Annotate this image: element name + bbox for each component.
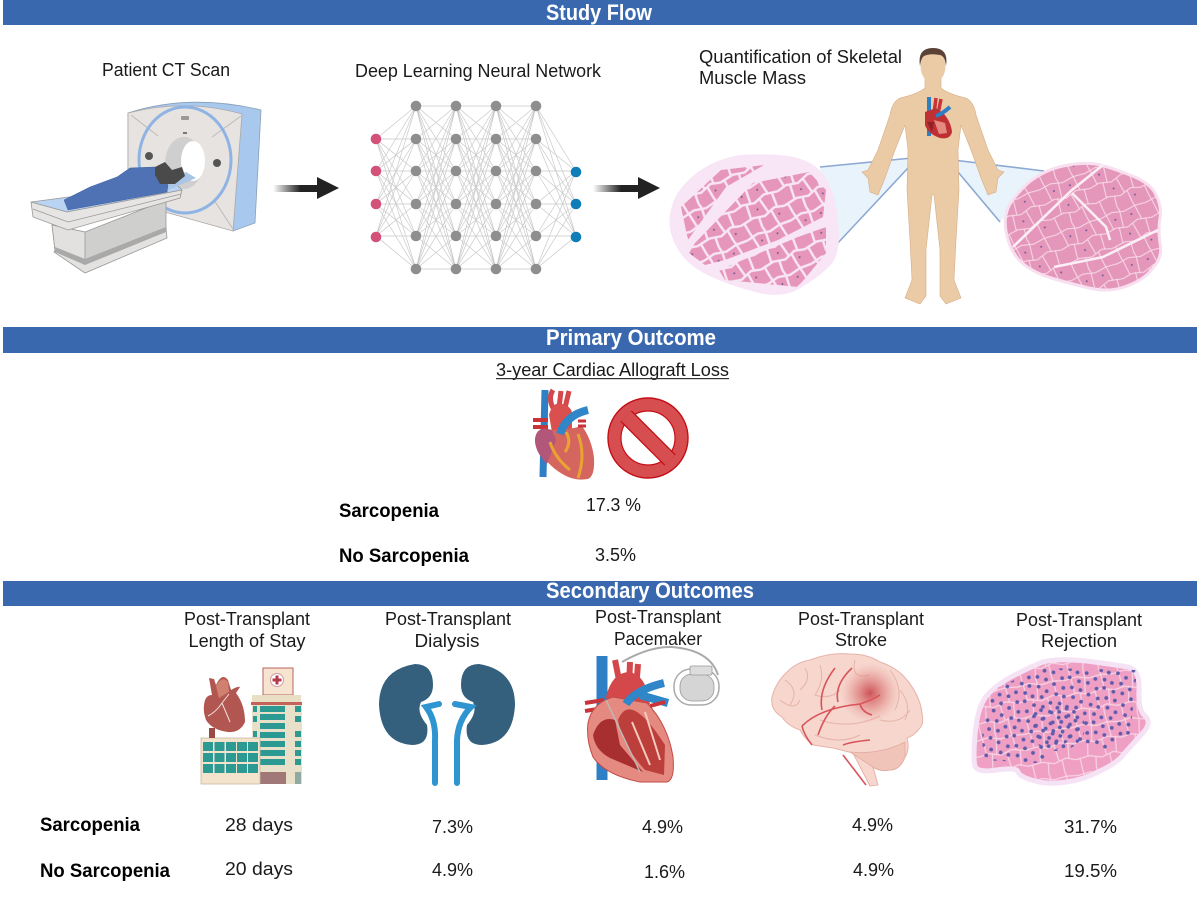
- column heading: Rejection: Post-Transplant: [1016, 609, 1142, 630]
- icon: prohibition sign: [608, 398, 688, 478]
- arrow: CT to network: [273, 177, 339, 199]
- column heading: Dialysis: Post-Transplant: [385, 608, 511, 629]
- illustration: human body with heart: [862, 48, 1004, 304]
- icon: heart and hospital: [201, 668, 302, 784]
- column heading: Pacemaker: Pacemaker: [614, 628, 702, 649]
- icon: CT scanner with patient: [31, 102, 261, 273]
- icon: kidneys: [379, 664, 515, 783]
- primary outcome row: No Sarcopenia: [339, 544, 636, 567]
- secondary outcomes row: No Sarcopenia: 4.9%: [432, 859, 473, 880]
- section header: Study Flow: Study Flow: [546, 0, 653, 25]
- column heading: Length of Stay: Post-Transplant: [184, 608, 310, 629]
- step label: Deep Learning Neural Network: Deep Learning Neural Network: [355, 60, 602, 81]
- section header: Study Flow: [3, 0, 1197, 25]
- secondary outcomes row: No Sarcopenia: No Sarcopenia: [40, 860, 170, 882]
- column heading: Stroke: Post-Transplant: [798, 608, 924, 629]
- step label: Quantification of Skeletal Muscle Mass: Quantification of Skeletal: [699, 46, 902, 67]
- icon: brain with stroke: [772, 654, 923, 786]
- secondary outcomes row: Sarcopenia: Sarcopenia: [40, 814, 140, 836]
- column heading: Rejection: [1016, 609, 1142, 651]
- subheading: 3-year Cardiac Allograft Loss: 3-year Cardiac Allograft Loss: [496, 359, 729, 380]
- column heading: Length of Stay: Length of Stay: [188, 630, 306, 651]
- column heading: Dialysis: Dialysis: [414, 630, 480, 651]
- secondary outcomes row: No Sarcopenia: 20 days: [225, 858, 293, 879]
- column heading: Pacemaker: Post-Transplant: [595, 606, 721, 627]
- column heading: Length of Stay: [184, 608, 310, 651]
- section header: Primary Outcome: [3, 325, 1197, 353]
- column heading: Stroke: [798, 608, 924, 650]
- primary outcome row: Sarcopenia: [339, 494, 641, 522]
- column heading: Rejection: Rejection: [1041, 630, 1117, 651]
- illustration: healthy muscle cross-section: [1005, 163, 1161, 290]
- body heart: [925, 97, 952, 138]
- secondary outcomes row: No Sarcopenia: 19.5%: [1064, 860, 1117, 881]
- secondary outcomes row: Sarcopenia: 4.9%: [642, 816, 683, 837]
- primary outcome row: Sarcopenia: 17.3 %: [586, 494, 641, 515]
- column heading: Stroke: Stroke: [835, 629, 887, 650]
- section header: Primary Outcome: Primary Outcome: [546, 325, 716, 350]
- section header: Secondary Outcomes: [3, 578, 1197, 606]
- secondary outcomes row: Sarcopenia: 4.9%: [852, 814, 893, 835]
- diagram: neural network: [371, 101, 581, 274]
- primary outcome row: No Sarcopenia: No Sarcopenia: [339, 545, 469, 567]
- arrow: network to quantification: [593, 177, 660, 199]
- secondary outcomes row: Sarcopenia: 28 days: [225, 814, 293, 835]
- callout wedges linking body to muscle: [820, 158, 1044, 245]
- icon: heart with pacemaker: [585, 647, 719, 782]
- illustration: muscle cross-section with sarcopenia: [671, 156, 837, 293]
- column heading: Dialysis: [385, 608, 511, 651]
- column heading: Pacemaker: [595, 606, 721, 649]
- primary outcome row: Sarcopenia: Sarcopenia: [339, 500, 439, 522]
- secondary outcomes row: Sarcopenia: 31.7%: [1064, 816, 1117, 837]
- step label: Quantification of Skeletal Muscle Mass: [699, 46, 902, 88]
- primary outcome row: No Sarcopenia: 3.5%: [595, 544, 636, 565]
- illustration: rejection biopsy tissue: [974, 660, 1148, 783]
- secondary outcomes row: Sarcopenia: [40, 814, 1117, 837]
- secondary outcomes row: Sarcopenia: 7.3%: [432, 816, 473, 837]
- icon: heart: [533, 390, 594, 480]
- step label: Quantification of Skeletal Muscle Mass: Muscle Mass: [699, 67, 806, 88]
- secondary outcomes row: No Sarcopenia: [40, 858, 1117, 882]
- section header: Secondary Outcomes: Secondary Outcomes: [546, 578, 754, 603]
- secondary outcomes row: No Sarcopenia: 4.9%: [853, 859, 894, 880]
- secondary outcomes row: No Sarcopenia: 1.6%: [644, 861, 685, 882]
- step label: Patient CT Scan: Patient CT Scan: [102, 59, 230, 80]
